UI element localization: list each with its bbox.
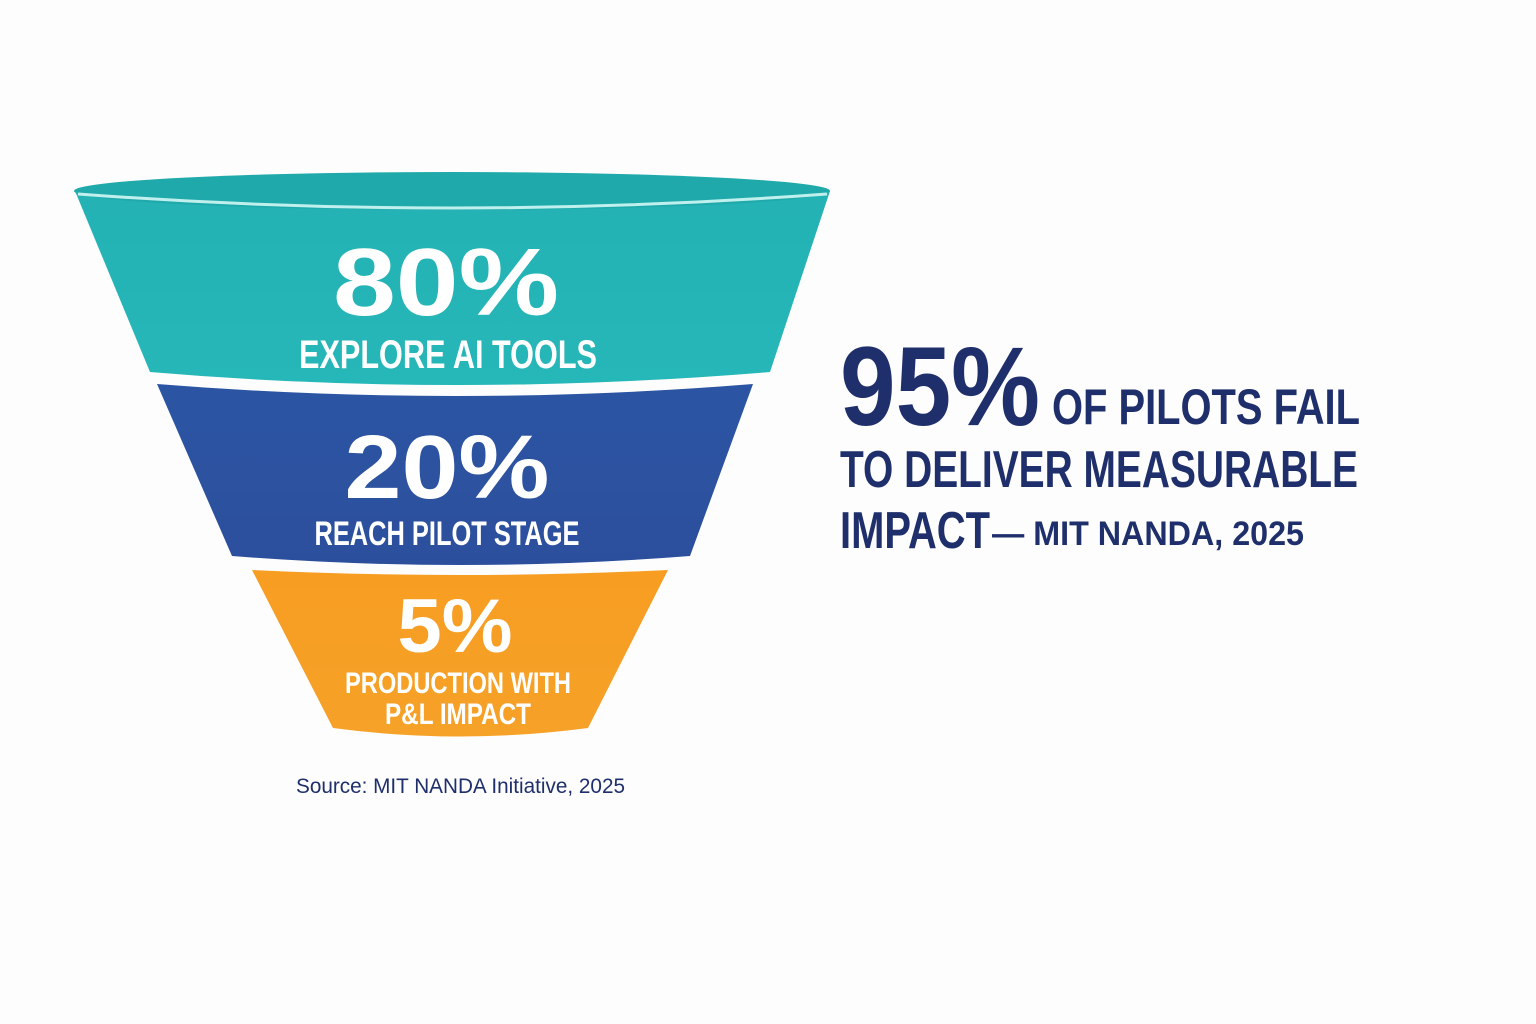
funnel tier 2: pilot: REACH PILOT STAGE bbox=[314, 515, 580, 553]
funnel tier 3: production: PRODUCTION WITH bbox=[345, 667, 571, 700]
funnel tier 3: production bbox=[252, 570, 668, 736]
funnel tier 1: explore bbox=[74, 172, 830, 385]
headline stat bbox=[840, 324, 1360, 560]
funnel tier 3: production: P&L IMPACT bbox=[385, 698, 531, 731]
funnel tier 3: production: 5% bbox=[398, 584, 512, 669]
headline stat: — MIT NANDA, 2025 bbox=[992, 515, 1304, 553]
headline stat: 95% bbox=[840, 324, 1040, 449]
headline stat: TO DELIVER MEASURABLE bbox=[840, 441, 1358, 499]
headline stat: OF PILOTS FAIL bbox=[1052, 379, 1360, 435]
funnel tier 1: explore: EXPLORE AI TOOLS bbox=[299, 333, 597, 377]
funnel tier 1: explore: 80% bbox=[333, 229, 559, 336]
funnel bbox=[74, 172, 830, 736]
funnel tier 2: pilot bbox=[157, 384, 753, 565]
source note: Source: MIT NANDA Initiative, 2025 bbox=[296, 775, 625, 798]
headline stat: IMPACT bbox=[840, 502, 990, 560]
funnel tier 2: pilot: 20% bbox=[344, 418, 550, 518]
